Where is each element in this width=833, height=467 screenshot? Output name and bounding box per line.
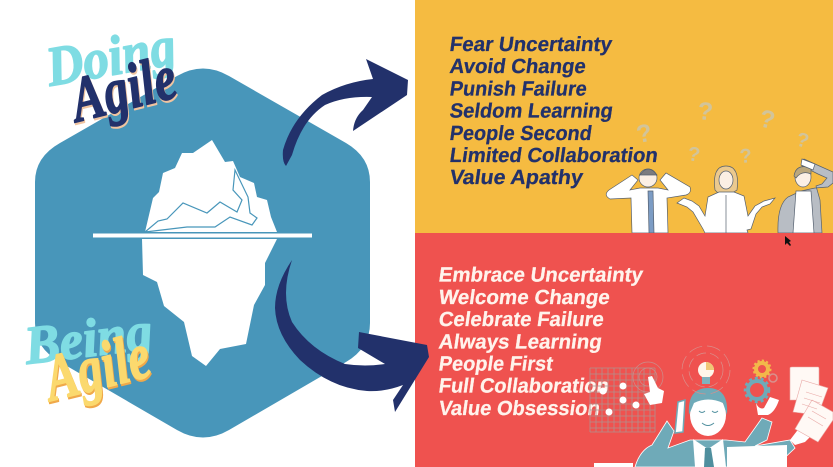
list: doing agile behaviours: Limited Collaboration [448,144,660,167]
list: doing agile behaviours: Fear Uncertainty [448,33,614,56]
title: doing agile [41,15,184,138]
illustration: go board with dots [590,362,663,432]
list: being agile behaviours [437,264,645,420]
list: doing agile behaviours: Punish Failure [448,77,589,100]
title: being agile [20,301,158,418]
icon: mouse cursor [785,236,791,246]
list: being agile behaviours: Always Learning [437,330,604,353]
title: doing agile: Agile [61,43,184,138]
illustration: documents [790,367,833,442]
illustration: shrugging woman [677,166,775,233]
arrow: down to being agile panel [275,260,429,412]
arrow: up to doing agile panel [283,59,408,166]
question marks: ? [794,129,811,153]
title: doing agile: Agile [60,41,183,136]
question marks: ? [757,104,778,135]
list: doing agile behaviours: Value Apathy [448,166,585,189]
title: being agile: Being [20,301,156,376]
illustration: laptop [594,445,787,467]
question marks [634,97,811,168]
list: being agile behaviours: People First [437,353,555,376]
illustration: multitasking man [635,376,814,467]
title: being agile: Agile [34,319,157,416]
title: doing agile: Doing [41,15,180,99]
list: being agile behaviours: Value Obsession [437,397,602,420]
list: being agile behaviours: Embrace Uncertainty [437,264,645,287]
illustration: puzzled man in grey jacket [778,159,833,233]
question marks: ? [634,119,654,149]
illustration: light bulb [682,346,730,394]
illustration: confused man, hands on head [606,169,690,233]
panel: being agile traits [415,233,833,467]
illustration: gears [745,360,777,402]
question marks: ? [686,143,701,167]
question marks: ? [696,97,714,126]
icon: iceberg [93,140,312,366]
list: doing agile behaviours [448,33,660,189]
question marks: ? [739,145,753,168]
title: being agile: Agile [35,321,158,418]
list: being agile behaviours: Full Collaboration [437,375,611,398]
list: doing agile behaviours: People Second [448,122,594,145]
list: being agile behaviours: Celebrate Failure [437,308,606,331]
list: doing agile behaviours: Avoid Change [448,55,588,78]
list: doing agile behaviours: Seldom Learning [448,100,615,123]
list: being agile behaviours: Welcome Change [437,286,612,309]
panel: doing agile traits [415,0,833,233]
hexagon background [35,68,370,438]
